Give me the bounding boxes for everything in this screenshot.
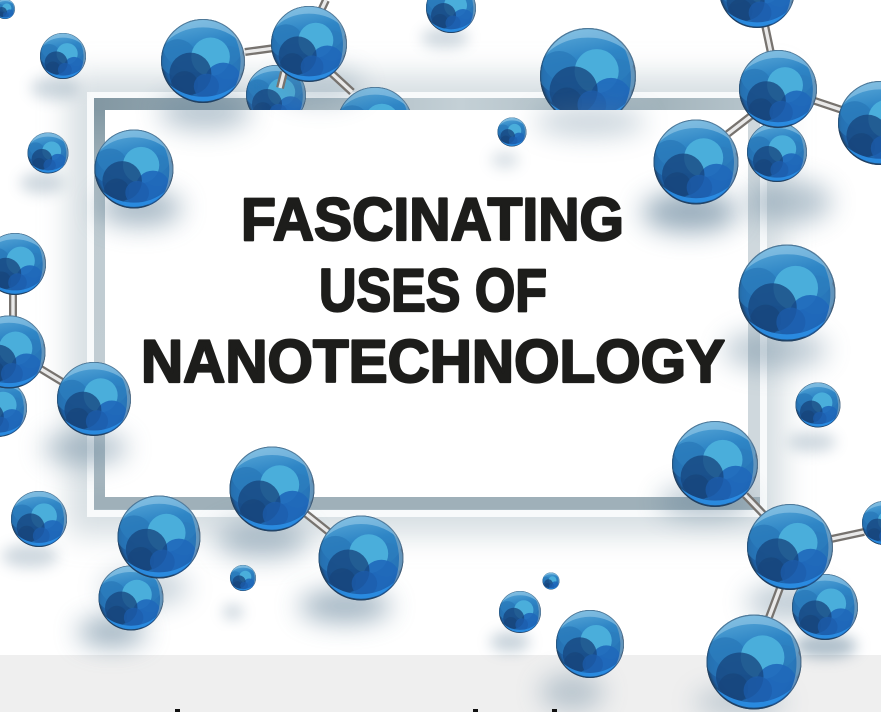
frame: white panel <box>105 110 748 497</box>
molecules behind frame <box>246 28 636 110</box>
molecule: lower left pair <box>97 495 202 631</box>
title line 2: USES OF <box>319 257 547 324</box>
molecule: top centre <box>159 6 348 103</box>
bottom grey band <box>0 655 881 712</box>
molecule: top right <box>652 0 881 205</box>
molecule: lower right <box>670 421 881 710</box>
title <box>141 186 725 395</box>
molecule: lower centre pair <box>228 446 405 601</box>
cropped heading tips at the bottom edge <box>175 709 557 712</box>
title line 1: FASCINATING <box>241 186 624 253</box>
frame: grey band <box>94 98 760 510</box>
frame: outer white strip <box>87 92 767 517</box>
molecule: left <box>0 233 132 437</box>
title line 3: NANOTECHNOLOGY <box>141 328 725 395</box>
frame: outer soft shadow <box>68 74 784 536</box>
